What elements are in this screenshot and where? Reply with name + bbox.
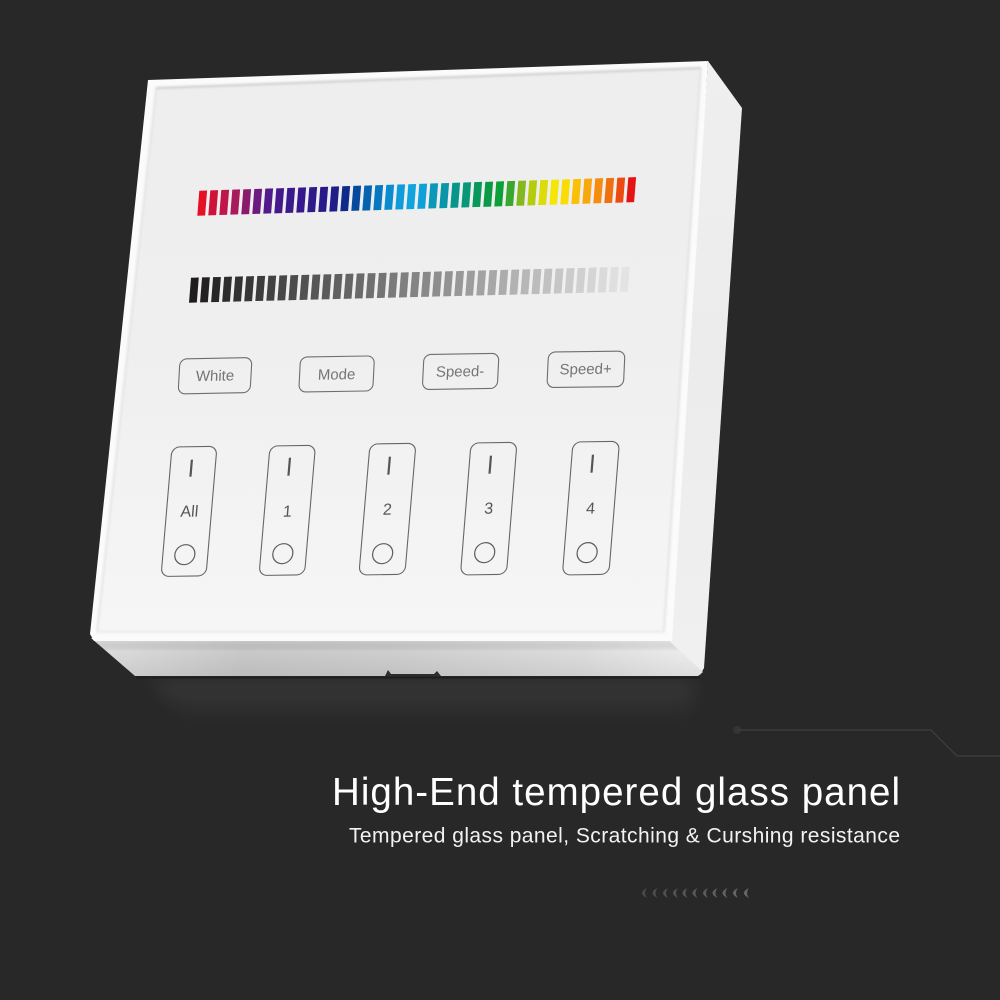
button: Speed+ [547,351,625,388]
decorative connector line [733,726,1000,756]
switch: 1 [259,445,316,576]
button: White: White [195,367,235,385]
colour slider [197,177,636,216]
switch: 3: 3 [484,500,494,518]
chevron row [642,888,749,898]
button: Speed- [422,353,499,390]
switch: 2 [359,443,416,575]
switch: 4 [562,441,620,575]
switch: All: All [180,503,199,521]
right side wall [668,61,742,675]
button: Mode: Mode [317,366,356,384]
button: Mode [299,356,374,392]
switch: All [161,446,217,576]
switch: 4: 4 [585,500,596,518]
glass face [97,68,701,632]
title: High-End tempered glass panel [332,771,900,814]
switch: 1: 1 [282,503,293,521]
brightness slider [189,267,630,303]
front rim [90,61,708,641]
switch: 3 [460,442,517,575]
floor reflection under device [136,678,700,722]
switch: 2: 2 [382,501,393,519]
button: Speed+: Speed+ [559,361,612,378]
bottom side wall [91,638,703,676]
subtitle: Tempered glass panel, Scratching & Curshing resistance [349,824,900,848]
button: Speed-: Speed- [436,363,485,381]
button: White [178,358,252,394]
panel device [90,61,742,676]
